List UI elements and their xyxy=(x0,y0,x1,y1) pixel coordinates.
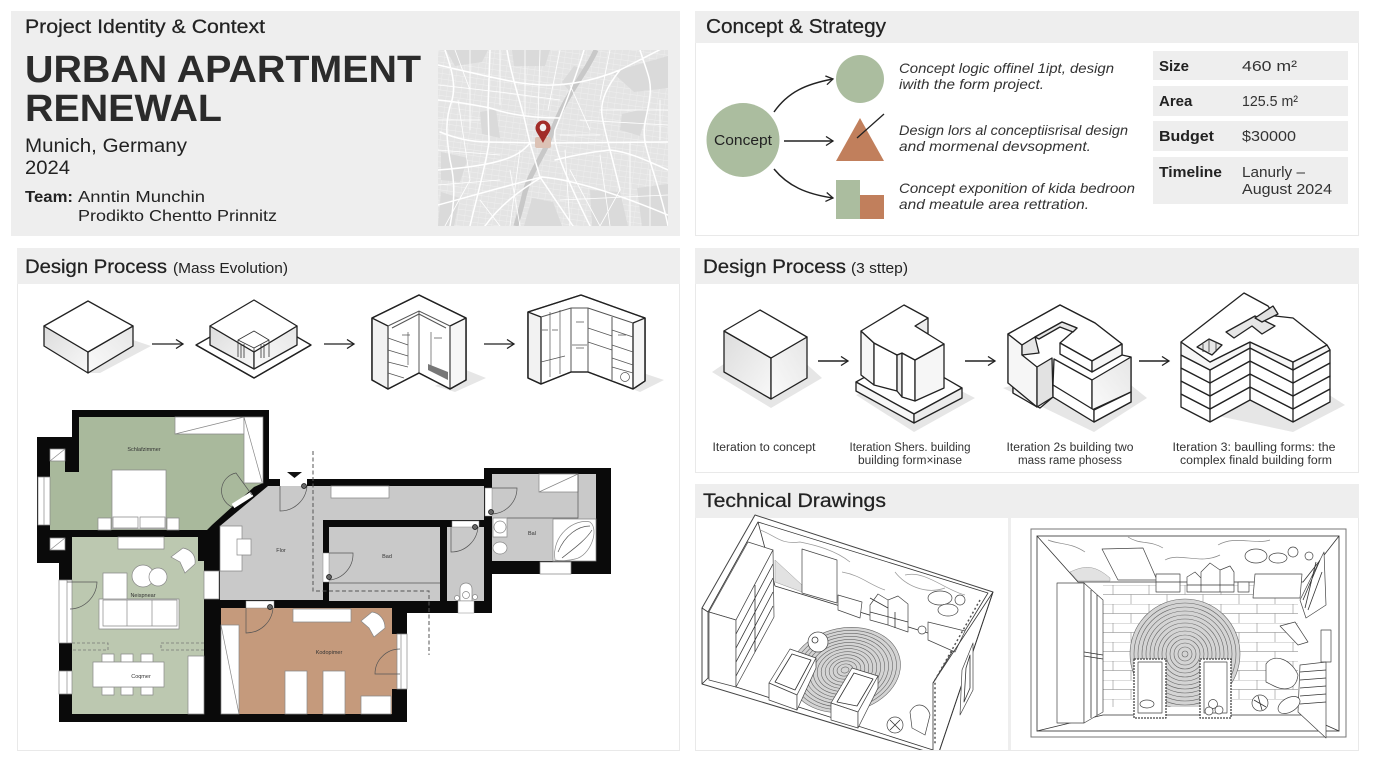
concept notes: and mormenal devsopment. xyxy=(899,138,1091,154)
mass study 2: box with entry notch xyxy=(196,300,311,378)
step captions: complex finald building form xyxy=(1180,455,1332,467)
team xyxy=(25,189,277,225)
project title: RENEWAL xyxy=(25,88,222,130)
concept circle xyxy=(706,103,780,177)
icon: stacked blocks xyxy=(836,180,884,219)
room: bedroom xyxy=(38,417,263,550)
mass study 1: solid box xyxy=(44,301,151,373)
beds xyxy=(1134,659,1231,718)
arrow xyxy=(324,343,354,345)
section cut line xyxy=(313,451,429,655)
step captions: Iteration 2s building two xyxy=(1006,442,1134,454)
project data table: Size xyxy=(1159,58,1189,75)
location and year: 2024 xyxy=(25,158,70,179)
step captions: Iteration 3: baulling forms: the xyxy=(1172,442,1336,454)
heading: design process 3 steps xyxy=(703,257,908,278)
door xyxy=(1102,548,1157,580)
concept notes: Concept logic offinel 1ipt, design xyxy=(899,60,1114,76)
team: Team: xyxy=(25,189,73,206)
wardrobe xyxy=(1057,583,1103,723)
panel: project identity and context xyxy=(11,11,680,236)
arrow xyxy=(1139,360,1169,362)
step captions: Iteration Shers. building xyxy=(850,442,970,454)
icon: green circle xyxy=(836,55,884,103)
icon: map pin xyxy=(536,121,550,143)
project data table: $30000 xyxy=(1242,128,1296,145)
concept notes: iwith the form project. xyxy=(899,76,1044,92)
panel: design process three steps xyxy=(695,248,1359,472)
heading: technical drawings: Technical Drawings xyxy=(703,491,886,512)
perspective room drawing xyxy=(1031,529,1346,738)
arrow xyxy=(965,360,995,362)
room: bedroom: Schlafzimmer xyxy=(127,447,161,453)
mass study 3: L-shaped interior xyxy=(372,295,486,392)
step 2: massing on podium xyxy=(856,305,975,432)
step 4: stacked final form xyxy=(1181,293,1345,432)
heading: design process 3 steps: (3 sttep) xyxy=(851,261,908,277)
project data table: 125.5 m² xyxy=(1242,93,1298,110)
room: hallway: Flor xyxy=(276,548,286,554)
room: living and dining: Coqmer xyxy=(131,674,151,680)
project title: URBAN APARTMENT xyxy=(25,49,421,91)
arrow: to triangle xyxy=(784,140,833,142)
step captions xyxy=(712,442,1336,467)
concept notes: Design lors al conceptiisrisal design xyxy=(899,122,1128,138)
arrow xyxy=(818,360,848,362)
mass study 4: fitted L-shaped interior xyxy=(528,295,664,392)
concept circle: Concept xyxy=(714,132,773,149)
room: bathroom: Bal xyxy=(528,531,536,537)
room: children's bedroom: Kodopimer xyxy=(316,650,342,656)
project data table xyxy=(1153,51,1348,204)
project title xyxy=(25,49,421,130)
heading: design process 3 steps: Design Process xyxy=(703,257,846,278)
floor plan xyxy=(37,410,611,722)
location and year: Munich, Germany xyxy=(25,136,188,157)
step 1: cube xyxy=(712,310,822,408)
right side blinds, chair and ball xyxy=(1252,552,1331,738)
panel: design process mass evolution xyxy=(17,248,680,750)
concept diagram xyxy=(706,55,884,219)
location map xyxy=(438,45,669,226)
project data table: Budget xyxy=(1159,128,1214,145)
concept notes: and meatule area rettration. xyxy=(899,196,1089,212)
room: living and dining xyxy=(59,537,204,714)
wall clouds xyxy=(1048,537,1270,560)
step captions: building form×inase xyxy=(858,455,962,467)
room: storage: Bad xyxy=(382,554,392,560)
rug xyxy=(798,627,901,712)
door xyxy=(802,549,837,603)
right wall and window xyxy=(933,592,993,755)
room: storage xyxy=(323,527,440,601)
project data table: August 2024 xyxy=(1242,181,1332,198)
room: hallway xyxy=(204,472,484,600)
room: children's bedroom xyxy=(221,601,407,714)
arrow: to blocks xyxy=(774,169,833,198)
arrow: to circle xyxy=(774,79,833,112)
project data table: Area xyxy=(1159,93,1193,110)
wardrobe xyxy=(709,542,774,687)
heading: project identity: Project Identity & Context xyxy=(25,17,266,38)
rug xyxy=(1130,599,1240,709)
mural clouds xyxy=(760,530,965,595)
panel: concept and strategy xyxy=(695,11,1359,236)
heading: design process mass evolution xyxy=(25,257,288,278)
concept notes: Concept exponition of kida bedroon xyxy=(899,180,1135,196)
arrow xyxy=(484,343,514,345)
panel: technical drawings xyxy=(695,484,1359,755)
room: bathroom xyxy=(485,474,596,574)
project data table: Timeline xyxy=(1159,164,1222,181)
beds xyxy=(769,649,878,728)
axonometric room drawing xyxy=(702,515,993,755)
concept notes xyxy=(899,60,1135,212)
project data table: Lanurly – xyxy=(1242,164,1306,181)
step 3: carved two-mass volume xyxy=(1003,305,1147,432)
team: Prodikto Chentto Prinnitz xyxy=(78,208,277,225)
heading: design process mass evolution: Design Process xyxy=(25,257,167,278)
heading: concept and strategy: Concept & Strategy xyxy=(706,16,886,38)
walls xyxy=(37,410,611,722)
team: Anntin Munchin xyxy=(78,189,205,206)
icon: orange triangle xyxy=(836,114,884,161)
arrow xyxy=(152,343,183,345)
shelves and toys xyxy=(1156,547,1313,598)
toys and shelves xyxy=(808,591,965,735)
step captions: mass rame phosess xyxy=(1018,455,1122,467)
step captions: Iteration to concept xyxy=(712,442,816,454)
project data table: 460 m² xyxy=(1242,58,1297,75)
heading: design process mass evolution: (Mass Evolution) xyxy=(173,261,288,277)
room: living and dining: Neispnear xyxy=(130,593,156,599)
location and year xyxy=(25,136,188,179)
room: toilet xyxy=(447,521,484,613)
